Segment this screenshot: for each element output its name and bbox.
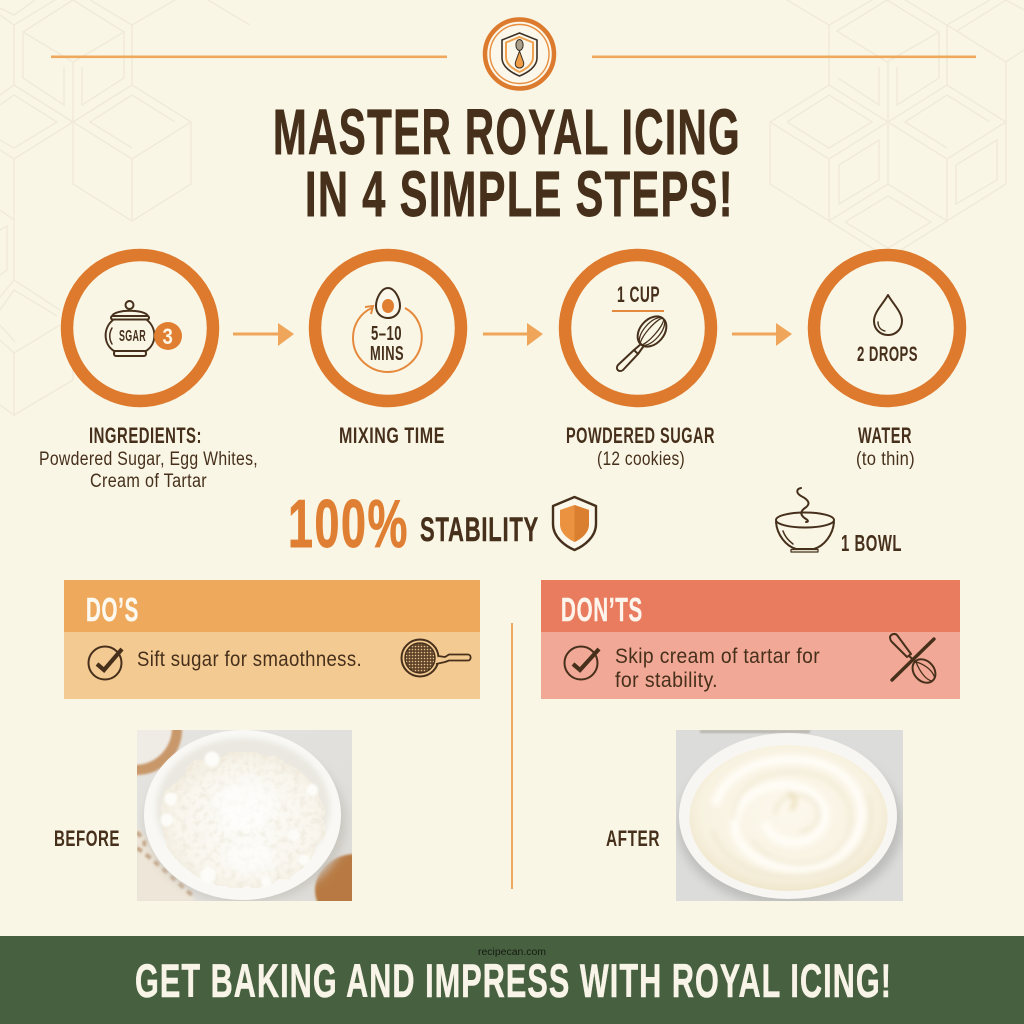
icon: shield medallion: [485, 20, 554, 88]
label: powdered sugar: (12 cookies): [597, 449, 685, 470]
label: ingredients: Cream of Tartar: [90, 471, 207, 492]
icon: whisk: [617, 311, 672, 371]
time text: 5–10: [371, 323, 402, 345]
background hexagon pattern: [0, 0, 1024, 415]
icon: mixing bowl with steam: [776, 488, 834, 552]
arrow 1: [233, 323, 294, 346]
step 4: water circle: [814, 255, 960, 401]
title: [273, 96, 741, 230]
icon: water drop: [874, 295, 902, 335]
step 3: powdered sugar circle: [565, 255, 711, 401]
do's heading: DO’S: [86, 591, 139, 628]
icon: check: [564, 646, 599, 680]
do's header: [64, 580, 480, 632]
icon: egg: [376, 288, 400, 318]
do's text: Sift sugar for smaothness.: [137, 648, 362, 671]
arrow 2: [483, 323, 543, 346]
stat: stability: STABILITY: [420, 511, 539, 549]
step 2: mixing time circle: [315, 255, 461, 401]
time text: MINS: [370, 343, 404, 365]
label: mixing time: MIXING TIME: [339, 423, 445, 448]
1 cup text: 1 CUP: [617, 282, 660, 307]
cup underline: [612, 310, 664, 312]
photo: powdered sugar in bowl: [137, 730, 352, 901]
timer ring arrow: [353, 306, 422, 372]
icon: stability shield: [553, 497, 596, 550]
label: 1 bowl: 1 BOWL: [841, 530, 902, 556]
stat: 100%: 100%: [288, 486, 409, 562]
label: powdered sugar: POWDERED SUGAR: [566, 423, 715, 448]
badge: 3: [154, 322, 182, 350]
label: water: WATER: [858, 423, 912, 448]
title: IN 4 SIMPLE STEPS!: [305, 158, 734, 230]
drops text: 2 DROPS: [857, 343, 918, 366]
title: MASTER ROYAL ICING: [273, 96, 741, 168]
don'ts text: for stability.: [615, 669, 718, 692]
arrow 3: [732, 323, 792, 346]
don'ts text: Skip cream of tartar for: [615, 645, 820, 668]
jar label: SGAR: [119, 328, 146, 345]
panel: do's: [64, 580, 480, 699]
don'ts text: [615, 645, 820, 692]
header rule left: [51, 56, 447, 58]
label: ingredients: [39, 423, 258, 492]
label: before: BEFORE: [54, 826, 120, 851]
don'ts heading: DON’TS: [561, 591, 643, 628]
label: powdered sugar: [566, 423, 715, 470]
icon: crossed out whisk: [890, 634, 940, 687]
source credit: recipecan.com: [478, 947, 546, 958]
footer banner: [0, 936, 1024, 1024]
don'ts body: [541, 632, 960, 699]
icon: check: [88, 646, 122, 680]
center divider: [511, 623, 513, 889]
label: after: AFTER: [606, 826, 660, 851]
icon: sieve: [402, 640, 471, 676]
label: water: (to thin): [856, 449, 915, 470]
panel: don'ts: [541, 580, 960, 699]
don'ts header: [541, 580, 960, 632]
badge: 3: 3: [162, 324, 174, 349]
label: ingredients: INGREDIENTS:: [89, 423, 202, 448]
label: ingredients: Powdered Sugar, Egg Whites,: [39, 449, 258, 470]
do's body: [64, 632, 480, 699]
label: water: [856, 423, 915, 470]
photo: finished icing in bowl: [676, 730, 903, 907]
step 1: ingredients circle: [67, 255, 213, 401]
header rule right: [592, 56, 976, 58]
icon: sugar jar: [106, 301, 154, 356]
time text: [370, 323, 404, 365]
